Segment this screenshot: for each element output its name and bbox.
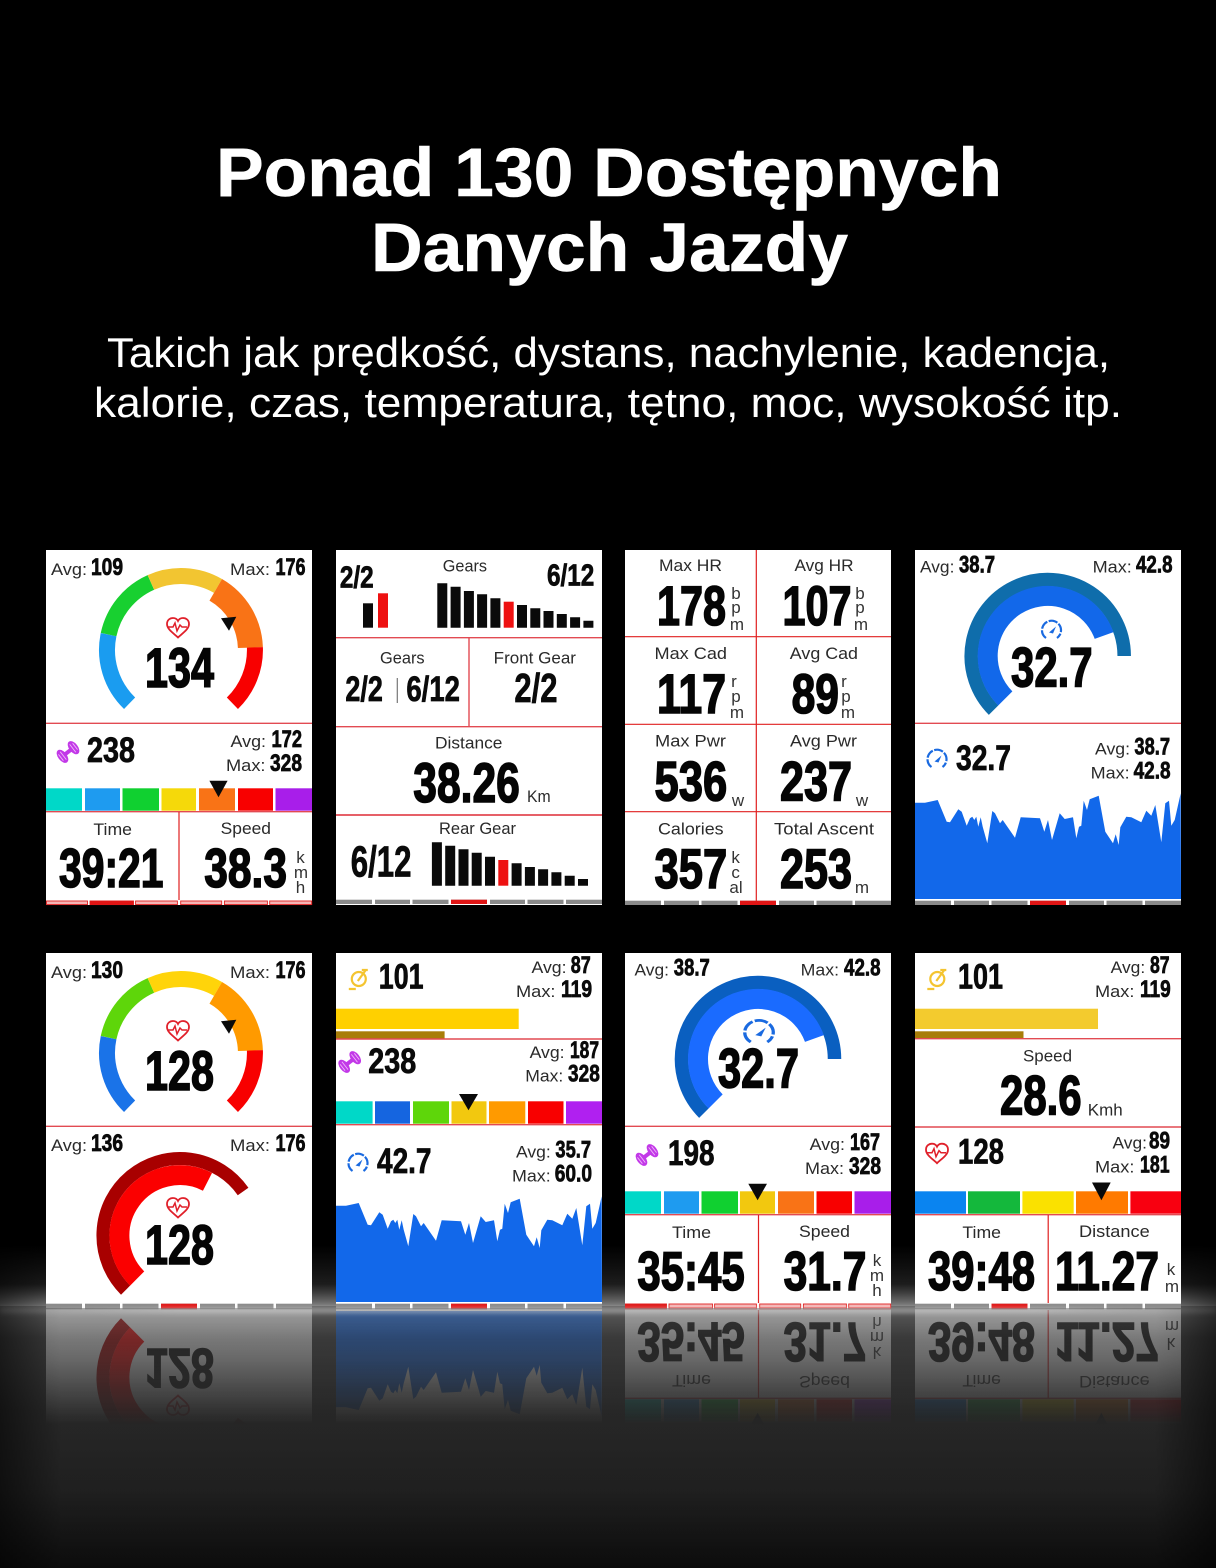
max cadence: r xyxy=(731,672,737,691)
heart rate stats: Max: xyxy=(230,963,270,982)
max power: 536 xyxy=(654,750,727,813)
gears field with bars: Gears xyxy=(443,557,487,576)
speed stats: 42.8 xyxy=(844,955,881,982)
calories: al xyxy=(729,878,743,897)
speed value: 32.7 xyxy=(718,1036,799,1099)
calories: c xyxy=(731,863,740,882)
second heart rate stats: 176 xyxy=(276,1130,306,1157)
panel: speed gauge, power, time and speed xyxy=(625,953,891,1308)
page tabs xyxy=(915,1304,1181,1308)
heart rate readout: 89 xyxy=(1149,1128,1170,1155)
distance field: Distance xyxy=(435,733,502,752)
heart rate stats: Max: xyxy=(230,560,270,579)
speed readout: Max: xyxy=(512,1166,551,1185)
cadence bar xyxy=(915,1009,1098,1039)
page tabs xyxy=(46,1304,312,1308)
second heart rate value: 128 xyxy=(145,1213,214,1276)
speed field: Speed xyxy=(799,1222,850,1241)
speed field: m xyxy=(870,1266,884,1285)
average cadence: p xyxy=(841,687,851,706)
speed stats: Max: xyxy=(801,961,839,980)
speed field: 38.3 xyxy=(204,837,287,899)
lower section: heart rate, time and distance xyxy=(915,1127,1181,1308)
total ascent: Total Ascent xyxy=(774,819,874,838)
average heart rate: m xyxy=(854,615,868,634)
max cadence: p xyxy=(731,687,741,706)
panel: heart rate gauge, power, time and speed xyxy=(46,550,312,905)
speed field: h xyxy=(872,1281,882,1300)
speed readout: Avg: xyxy=(516,1142,551,1161)
speed value: 32.7 xyxy=(1011,636,1093,699)
cadence readout: Max: xyxy=(516,982,556,1001)
average power: 237 xyxy=(780,750,852,813)
average power: w xyxy=(855,791,869,810)
heart rate stats xyxy=(51,957,306,984)
cadence readout: 101 xyxy=(958,958,1003,997)
heart rate stats: 176 xyxy=(276,957,306,984)
calories: Calories xyxy=(658,819,724,838)
icon: speedometer xyxy=(1042,621,1061,638)
heart rate zone gauge xyxy=(107,576,255,703)
cadence bar xyxy=(336,1009,519,1039)
max cadence: 117 xyxy=(657,662,726,725)
heart rate stats xyxy=(51,554,306,581)
cadence readout xyxy=(958,952,1171,1003)
average heart rate: b xyxy=(855,584,865,603)
panel: gears and distance xyxy=(336,550,602,905)
red heart rate gauge xyxy=(103,1159,243,1290)
speed field: m xyxy=(294,863,308,882)
power readout xyxy=(87,726,302,777)
second heart rate stats: Avg: xyxy=(51,1136,87,1155)
rear gear field with bars: 6/12 xyxy=(351,838,412,887)
speed readout: 60.0 xyxy=(555,1160,592,1187)
power readout: Avg: xyxy=(230,732,266,751)
rear gear field with bars xyxy=(351,819,588,887)
gears field with bars: 6/12 xyxy=(547,558,594,593)
icon: dumbbell xyxy=(336,1049,363,1075)
speed gauge xyxy=(971,580,1124,710)
max heart rate: m xyxy=(730,615,744,634)
calories: 357 xyxy=(654,837,727,900)
distance field: 11.27 xyxy=(1055,1240,1159,1302)
speed field: Speed xyxy=(221,819,271,838)
front gear field: 2/2 xyxy=(514,665,557,711)
heart rate readout: 181 xyxy=(1140,1151,1170,1178)
icon: heart xyxy=(926,1144,948,1163)
speed stats: 38.7 xyxy=(674,955,710,982)
distance field: Distance xyxy=(1079,1222,1150,1241)
floor reflection of lower panels xyxy=(46,1306,1181,1414)
subtitle: Takich jak prędkość, dystans, nachylenie, kadencja, xyxy=(107,329,1110,376)
icon: heart xyxy=(167,1198,189,1218)
max cadence: m xyxy=(730,703,744,722)
power readout: 238 xyxy=(368,1042,416,1081)
time field: Time xyxy=(93,820,132,839)
page tabs xyxy=(336,900,602,904)
max heart rate: Max HR xyxy=(659,556,722,575)
cadence readout: 119 xyxy=(561,976,592,1003)
heart rate readout: Max: xyxy=(1095,1157,1134,1176)
icon: speedometer small xyxy=(928,750,946,767)
speed stats: Avg: xyxy=(920,558,954,577)
average power: Avg Pwr xyxy=(790,732,857,751)
heart rate readout: 128 xyxy=(958,1133,1004,1172)
title: Ponad 130 Dostępnych xyxy=(216,134,1002,211)
power zone bar xyxy=(46,781,312,811)
icon: cadence xyxy=(927,970,946,989)
average cadence: 89 xyxy=(792,662,839,725)
speed field: Speed xyxy=(1023,1046,1072,1065)
heart rate readout: Avg: xyxy=(1112,1134,1147,1153)
page tabs xyxy=(46,901,312,905)
gears field with bars: 2/2 xyxy=(340,560,374,595)
power readout: 328 xyxy=(849,1153,881,1180)
panel: cadence, power and speed chart xyxy=(336,952,602,1308)
icon: speedometer large xyxy=(745,1020,773,1042)
heart rate stats: 109 xyxy=(91,554,123,581)
time field: Time xyxy=(672,1223,711,1242)
second heart rate stats: Max: xyxy=(230,1136,270,1155)
cadence readout: Max: xyxy=(1095,982,1134,1001)
max power: Max Pwr xyxy=(655,732,726,751)
average cadence: Avg Cad xyxy=(790,644,858,663)
distance field: 38.26 xyxy=(413,751,520,814)
lower section: power, time and speed xyxy=(625,1126,891,1308)
time field xyxy=(59,820,164,899)
combined gears field: 6/12 xyxy=(406,670,460,709)
cadence readout: Avg: xyxy=(1111,958,1145,977)
power readout xyxy=(368,1037,600,1087)
speed gauge xyxy=(682,983,834,1113)
power readout xyxy=(668,1129,881,1180)
heart rate value: 128 xyxy=(145,1039,214,1102)
cadence readout: 87 xyxy=(1150,952,1170,979)
heart rate value: 134 xyxy=(145,636,214,699)
time field xyxy=(637,1223,745,1302)
time field: 39:21 xyxy=(59,837,164,899)
cadence readout: 87 xyxy=(571,952,591,979)
distance field: m xyxy=(1165,1277,1179,1296)
speed stats xyxy=(920,552,1172,579)
page tabs xyxy=(915,901,1181,905)
second heart rate stats xyxy=(51,1130,306,1157)
average heart rate: p xyxy=(855,598,865,617)
speed stats: Avg: xyxy=(634,961,669,980)
heart rate readout xyxy=(958,1128,1170,1178)
max heart rate: b xyxy=(731,584,741,603)
page tabs xyxy=(625,901,891,905)
rear gear field with bars: Rear Gear xyxy=(439,819,516,838)
cadence readout: Avg: xyxy=(532,958,566,977)
speed readout: 32.7 xyxy=(956,739,1011,778)
total ascent: 253 xyxy=(780,837,852,900)
power readout: 238 xyxy=(87,731,135,770)
power readout: Avg: xyxy=(530,1043,565,1062)
cadence readout: 101 xyxy=(379,958,424,997)
heart rate zone bar xyxy=(915,1182,1181,1214)
speed readout: 42.8 xyxy=(1134,757,1171,784)
subtitle: kalorie, czas, temperatura, tętno, moc, wysokość itp. xyxy=(94,379,1122,426)
cadence readout: 119 xyxy=(1140,976,1171,1003)
power zone bar xyxy=(625,1184,891,1214)
time field: 35:45 xyxy=(637,1240,745,1302)
lower section: speed readout and chart xyxy=(336,1124,602,1308)
time field: 39:48 xyxy=(928,1240,1035,1302)
distance field: k xyxy=(1167,1260,1176,1279)
icon: heart xyxy=(167,1021,189,1040)
total ascent: m xyxy=(855,878,869,897)
title: Danych Jazdy xyxy=(371,209,848,286)
average cadence: m xyxy=(841,703,855,722)
panel: heart rate gauges xyxy=(46,953,312,1308)
heart rate stats: Avg: xyxy=(51,560,87,579)
power readout: 328 xyxy=(270,750,302,777)
power readout: 187 xyxy=(570,1037,599,1064)
icon: dumbbell xyxy=(54,739,82,765)
power readout: 328 xyxy=(568,1060,600,1087)
heart rate stats: 176 xyxy=(276,554,306,581)
max heart rate: p xyxy=(731,598,741,617)
combined gears field: Gears xyxy=(380,648,425,667)
speed field: k xyxy=(873,1251,882,1270)
max power: w xyxy=(731,791,745,810)
max cadence: Max Cad xyxy=(654,644,727,663)
front gear field: Front Gear xyxy=(494,648,576,667)
icon: heart xyxy=(167,618,189,638)
speed field: k xyxy=(296,848,305,867)
combined gears field: 2/2 xyxy=(345,670,383,709)
page tabs xyxy=(336,1304,602,1308)
heart rate stats: 130 xyxy=(91,957,123,984)
average heart rate: Avg HR xyxy=(794,556,854,575)
speed field xyxy=(1000,1046,1123,1127)
speed area chart xyxy=(915,793,1181,899)
speed readout: 35.7 xyxy=(555,1136,591,1163)
title xyxy=(216,134,1002,286)
panel: eight metric grid xyxy=(625,550,891,905)
second heart rate stats: 136 xyxy=(91,1130,123,1157)
front gear field xyxy=(494,648,576,711)
speed readout xyxy=(377,1136,592,1187)
speed stats: Max: xyxy=(1093,558,1132,577)
distance field: Km xyxy=(527,787,551,806)
icon: cadence xyxy=(349,970,368,989)
speed area chart xyxy=(336,1196,602,1302)
speed stats: 38.7 xyxy=(959,552,995,579)
power readout: Max: xyxy=(525,1066,563,1085)
speed field: 28.6 xyxy=(1000,1064,1082,1127)
speed readout xyxy=(956,733,1171,784)
power readout: 167 xyxy=(850,1129,880,1156)
subtitle xyxy=(94,329,1122,426)
floor xyxy=(0,1245,1216,1568)
lower section: red heart rate gauge xyxy=(46,1126,312,1308)
average heart rate: 107 xyxy=(782,574,852,637)
time field xyxy=(928,1223,1035,1302)
power readout: Max: xyxy=(226,756,266,775)
power readout: 172 xyxy=(272,726,302,753)
heart rate zone gauge xyxy=(107,979,255,1106)
speed stats: 42.8 xyxy=(1136,552,1172,579)
average cadence: r xyxy=(841,672,847,691)
icon: dumbbell xyxy=(633,1142,661,1168)
power readout: 198 xyxy=(668,1134,714,1173)
speed readout: Avg: xyxy=(1095,739,1130,758)
gears field with bars xyxy=(340,557,594,628)
max heart rate: 178 xyxy=(657,574,726,637)
panel: cadence, speed, heart rate, time and distance xyxy=(915,952,1181,1308)
speed field: h xyxy=(296,878,305,897)
horizon glow xyxy=(0,1308,1216,1313)
heart rate stats: Avg: xyxy=(51,963,87,982)
combined gears field xyxy=(345,648,460,709)
speed field: 31.7 xyxy=(784,1240,866,1302)
power readout: Max: xyxy=(805,1159,844,1178)
time field: Time xyxy=(962,1223,1001,1242)
speed readout: 38.7 xyxy=(1134,733,1170,760)
icon: speedometer small xyxy=(348,1154,368,1171)
speed field: Kmh xyxy=(1088,1101,1123,1120)
power zone bar xyxy=(336,1094,602,1124)
speed readout: 42.7 xyxy=(377,1142,432,1181)
page tabs xyxy=(625,1304,891,1308)
calories: k xyxy=(731,848,740,867)
cadence readout xyxy=(379,952,592,1003)
power readout: Avg: xyxy=(810,1135,845,1154)
speed stats xyxy=(634,955,881,982)
panel: speed gauge and speed chart xyxy=(915,550,1181,905)
speed readout: Max: xyxy=(1091,763,1130,782)
